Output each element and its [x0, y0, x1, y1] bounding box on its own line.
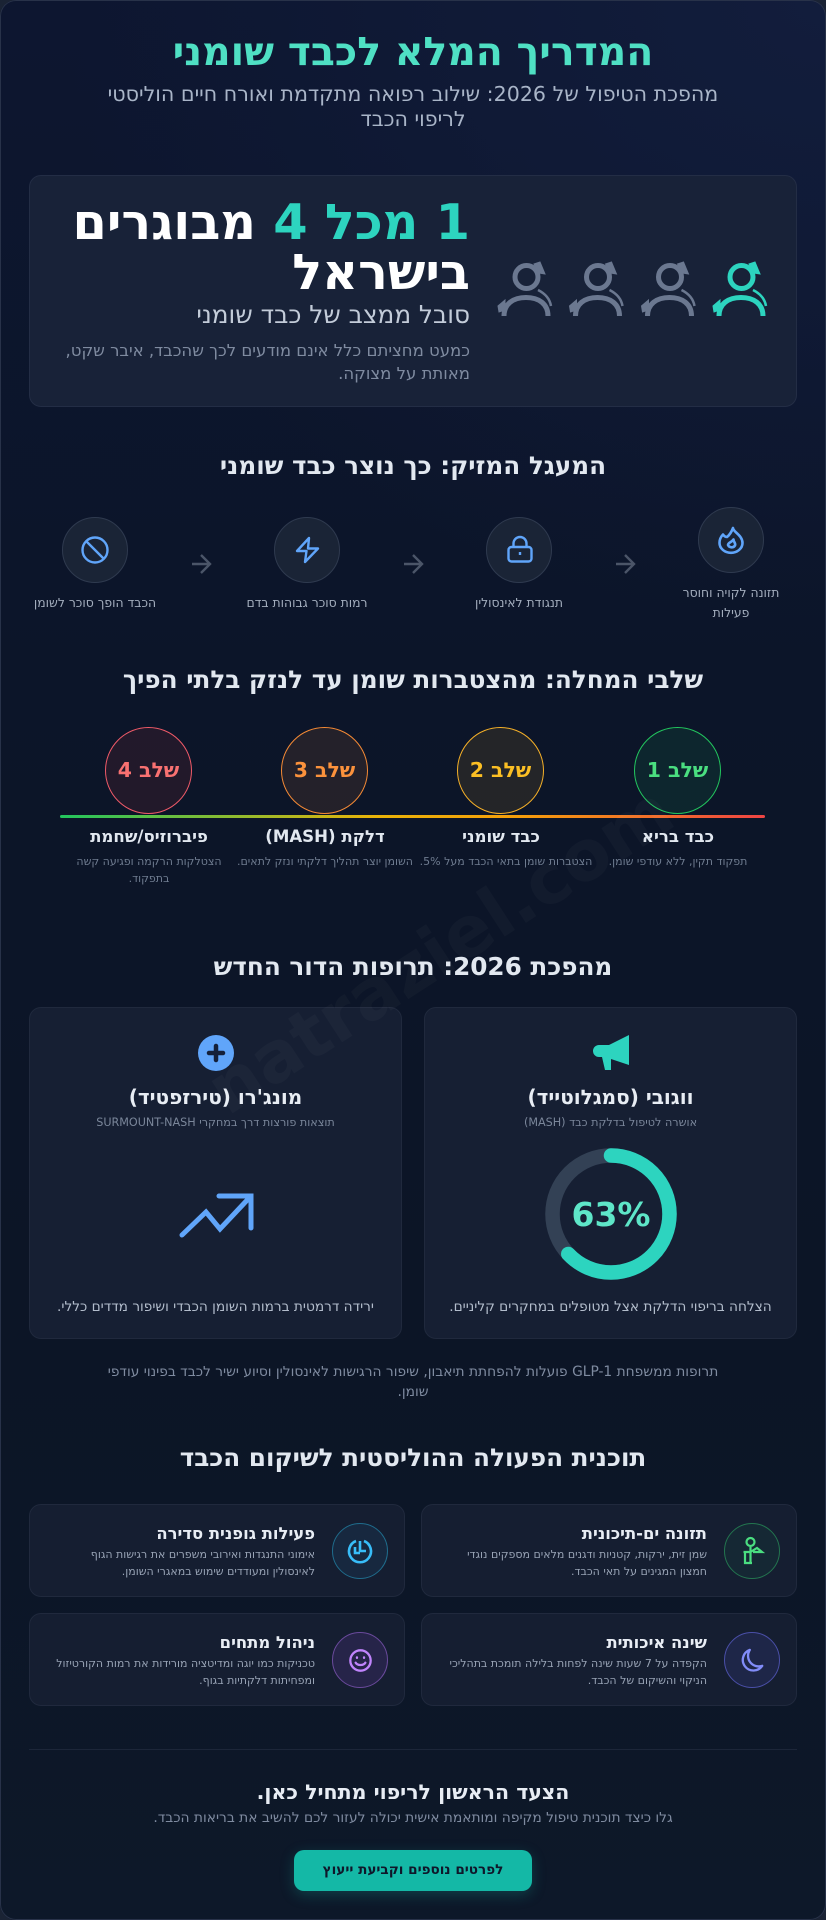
- drug result: ירידה דרמטית ברמות השומן הכבדי ושיפור מדדים כללי.: [57, 1299, 374, 1315]
- label: פעילות: [713, 605, 749, 620]
- stage description: תפקוד תקין, ללא עודפי שומן.: [609, 855, 747, 868]
- icons: four people: [498, 261, 768, 316]
- panel: physical activity: [29, 1504, 405, 1597]
- section: disease stages: [60, 665, 765, 885]
- description: ומפחיתות דלקתיות בגוף.: [199, 1674, 315, 1687]
- progress line: [60, 815, 765, 818]
- drug subtitle: אושרה לטיפול בדלקת כבד (MASH): [524, 1116, 697, 1129]
- stage description: [76, 855, 222, 885]
- drug name: ווגובי (סמגלוטייד): [528, 1085, 693, 1109]
- description: הקפדה על 7 שעות שינה לפחות בלילה תומכת בתהליכי: [450, 1657, 707, 1670]
- heading: שלבי המחלה: מהצטברות שומן עד לנזק בלתי הפיך: [123, 665, 703, 694]
- icon: megaphone: [593, 1035, 629, 1070]
- GLP-1 note: שומן.: [397, 1384, 429, 1400]
- stage description: הצטלקות הרקמה ופגיעה קשה: [76, 855, 222, 868]
- icon: smile: [332, 1632, 388, 1688]
- header: [108, 29, 718, 131]
- donut chart: 63%: 63%: [572, 1195, 650, 1234]
- label: [683, 585, 779, 620]
- description: טכניקות כמו יוגה ומדיטציה מורידות את רמות הקורטיזול: [56, 1657, 315, 1670]
- statistic description: [66, 341, 470, 383]
- description: [467, 1548, 707, 1578]
- panel: 1 in 4 statistic: [29, 175, 797, 407]
- icon: plus circle: [198, 1035, 234, 1071]
- label: תזונה לקויה וחוסר: [683, 585, 779, 600]
- title: המדריך המלא לכבד שומני: [173, 29, 653, 75]
- description: [450, 1657, 707, 1687]
- stage name: פיברוזיס/שחמת: [90, 827, 208, 846]
- statistic headline: בישראל: [292, 243, 470, 301]
- CTA button: לפרטים נוספים וקביעת ייעוץ: [323, 1862, 503, 1878]
- description: לאינסולין ומעודדים שימוש במאגרי השומן.: [122, 1565, 315, 1578]
- stage 2: [420, 727, 592, 868]
- stage badge: [457, 727, 544, 814]
- heading: 2026 revolution: מהפכת 2026: תרופות הדור החדש: [214, 952, 612, 981]
- GLP-1 note: [108, 1364, 718, 1400]
- subtitle: לריפוי הכבד: [360, 107, 466, 131]
- title: תזונה ים-תיכונית: [582, 1524, 707, 1543]
- panel: quality sleep: [421, 1613, 797, 1706]
- drug subtitle: תוצאות פורצות דרך במחקרי SURMOUNT-NASH: [96, 1116, 335, 1129]
- label: תנגודת לאינסולין: [475, 595, 563, 610]
- subtitle: מהפכת הטיפול של 2026: שילוב רפואה מתקדמת ואורח חיים הוליסטי: [108, 82, 718, 106]
- stage badge: שלב 4: [118, 758, 179, 782]
- stage name: כבד שומני: [462, 827, 540, 846]
- icon: person: [724, 1523, 780, 1579]
- stage description: בתפקוד.: [129, 872, 169, 885]
- CTA text: גלו כיצד תוכנית טיפול מקיפה ומותאמת אישית יכולה לעזור לכם להשיב את בריאות הכבד.: [153, 1810, 673, 1826]
- description: חמצון המגינים על תאי הכבד.: [571, 1565, 707, 1578]
- panel: stress management: [29, 1613, 405, 1706]
- stage name: כבד בריא: [642, 827, 714, 846]
- stage 4: [76, 727, 222, 885]
- label: הכבד הופך סוכר לשומן: [34, 595, 156, 610]
- arrow: [616, 554, 636, 574]
- icon: flame: [698, 507, 764, 573]
- drug name: מונג'רו (טירזפטיד): [129, 1085, 302, 1109]
- CTA heading: הצעד הראשון לריפוי מתחיל כאן.: [257, 1780, 569, 1804]
- stage badge: [105, 727, 192, 814]
- statistic description: מאותת על מצוקה.: [338, 364, 470, 383]
- drug result: הצלחה בריפוי הדלקת אצל מטופלים במחקרים קליניים.: [449, 1299, 772, 1315]
- statistic headline: 1 מכל 4 מבוגרים: [72, 193, 470, 251]
- step: poor diet: [683, 507, 779, 620]
- statistic headline: [72, 193, 470, 301]
- icon: activity: [332, 1523, 388, 1579]
- GLP-1 note: תרופות ממשפחת GLP-1 פועלות להפחתת תיאבון, שיפור הרגישות לאינסולין וסיוע ישיר לכבד בפינוי עודפי: [108, 1364, 718, 1380]
- subtitle: [108, 82, 718, 131]
- heading: המעגל המזיק: כך נוצר כבד שומני: [220, 451, 606, 480]
- CTA button: [294, 1850, 532, 1891]
- heading: action plan: תוכנית הפעולה ההוליסטית לשיקום הכבד: [180, 1443, 646, 1472]
- arrow: [192, 554, 212, 574]
- stage badge: שלב 2: [470, 758, 531, 782]
- stage badge: שלב 1: [647, 758, 708, 782]
- label: רמות סוכר גבוהות בדם: [246, 595, 368, 610]
- stage name: דלקת (MASH): [265, 827, 385, 846]
- description: שמן זית, ירקות, קטניות ודגנים מלאים מספקים נוגדי: [467, 1548, 707, 1561]
- icon: lightning: [274, 517, 340, 583]
- donut chart: 63%: [545, 1148, 677, 1280]
- stage badge: [634, 727, 721, 814]
- section: vicious cycle: [34, 451, 779, 620]
- arrow: [404, 554, 424, 574]
- step: high blood sugar: [246, 517, 368, 610]
- panel: Mediterranean diet: [421, 1504, 797, 1597]
- step: insulin resistance: [475, 517, 563, 610]
- stage badge: [281, 727, 368, 814]
- stage 1: [609, 727, 747, 868]
- title: ניהול מתחים: [220, 1633, 315, 1652]
- step: sugar to fat: [34, 517, 156, 610]
- icon: lock: [486, 517, 552, 583]
- icon: trend arrow: [180, 1194, 254, 1238]
- description: אימוני התנגדות ואירובי משפרים את רגישות הגוף: [91, 1548, 315, 1561]
- description: הניקוי והשיקום של הכבד.: [588, 1674, 707, 1687]
- statistic description: כמעט מחציתם כלל אינם מודעים לכך שהכבד, איבר שקט,: [66, 341, 470, 360]
- statistic subhead: סובל ממצב של כבד שומני: [196, 300, 470, 329]
- stage badge: שלב 3: [294, 758, 355, 782]
- watermark: natraziel.com: [192, 769, 688, 1131]
- description: [91, 1548, 315, 1578]
- panel: Mounjaro: [29, 1007, 402, 1339]
- icon: prohibition: [62, 517, 128, 583]
- title: פעילות גופנית סדירה: [156, 1524, 315, 1543]
- stage description: השומן יוצר תהליך דלקתי ונזק לתאים.: [237, 855, 413, 868]
- description: [56, 1657, 315, 1687]
- stage description: הצטברות שומן בתאי הכבד מעל 5%.: [420, 855, 592, 868]
- call to action: [153, 1780, 673, 1900]
- icon: moon: [724, 1632, 780, 1688]
- stage 3: [237, 727, 413, 868]
- panel: Wegovy: [424, 1007, 797, 1339]
- title: שינה איכותית: [606, 1633, 707, 1652]
